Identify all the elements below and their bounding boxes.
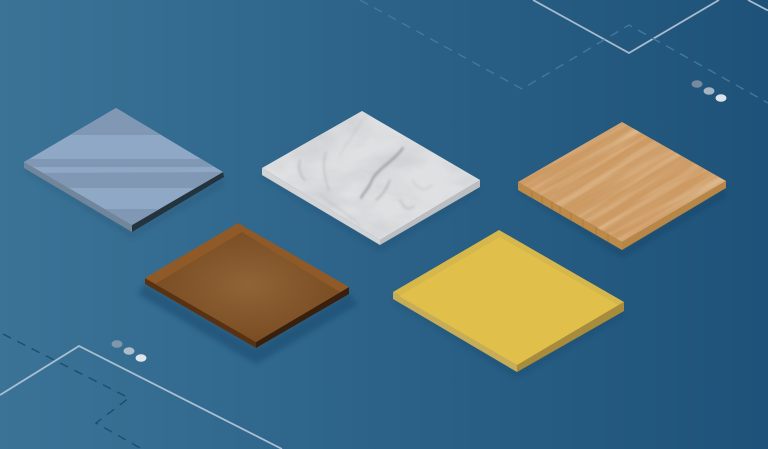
- panel: glass sample: [24, 108, 224, 232]
- bottom-left dots: [112, 340, 146, 362]
- panel: leather sample: [138, 223, 358, 364]
- top-right dots: [692, 80, 726, 102]
- panel: yellow acrylic sample: [393, 230, 624, 378]
- bottom-left outline decoration: [0, 334, 282, 449]
- top-right outline decoration: [360, 0, 768, 103]
- panel: marble sample: [262, 111, 480, 245]
- panel: wood sample: [518, 122, 726, 256]
